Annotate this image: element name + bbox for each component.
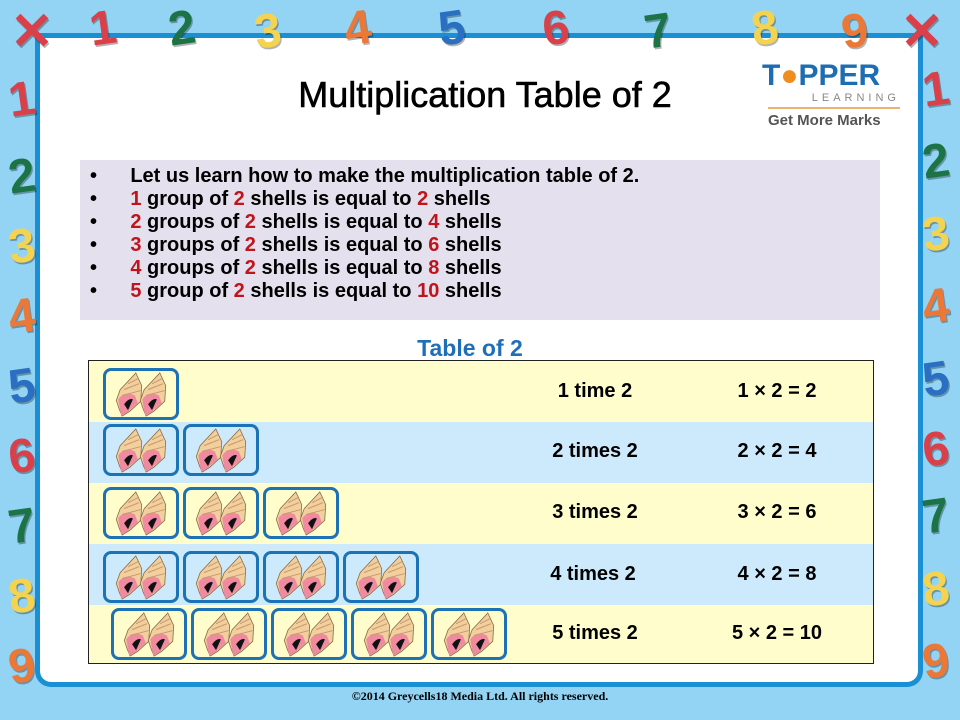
decorative number border: 2 [5, 148, 39, 205]
decorative number border: 1 [5, 71, 39, 128]
decorative number border: 7 [919, 488, 953, 545]
bullet panel [80, 160, 880, 320]
decorative number border: ✕ [10, 3, 54, 61]
row 3 [89, 483, 873, 544]
bullet panel: • 3 groups of 2 shells is equal to 6 shells [90, 234, 502, 256]
row 2: 2 times 2 [552, 440, 638, 462]
decorative number border: 6 [5, 428, 39, 485]
decorative number border: ✕ [900, 3, 944, 61]
decorative number border: 3 [919, 206, 953, 263]
row 4 [89, 544, 873, 605]
table [88, 360, 874, 664]
decorative number border: 5 [919, 351, 953, 408]
bullet panel: • 2 groups of 2 shells is equal to 4 shells [90, 211, 502, 233]
row 5 [89, 605, 873, 664]
table heading: Table of 2 [417, 335, 523, 361]
row 5: 5 times 2 [552, 622, 638, 644]
row 2: 2 × 2 = 4 [738, 440, 816, 462]
bullet panel: • 4 groups of 2 shells is equal to 8 shells [90, 257, 502, 279]
row 1: 1 × 2 = 2 [738, 380, 816, 402]
decorative number border: 8 [748, 0, 782, 57]
decorative number border: 6 [919, 421, 953, 478]
decorative number border: 2 [165, 0, 199, 57]
decorative number border: 7 [641, 3, 675, 60]
decorative number border: 3 [251, 3, 285, 60]
decorative number border: 9 [919, 633, 953, 690]
logo: TopperLearning [762, 59, 900, 129]
decorative number border: 4 [5, 288, 39, 345]
decorative number border: 5 [435, 0, 469, 57]
logo: TopperLearning: Get More Marks [768, 112, 881, 129]
decorative number border: 4 [919, 278, 953, 335]
bullet panel: • 5 group of 2 shells is equal to 10 shells [90, 280, 502, 302]
decorative number border: 1 [919, 61, 953, 118]
copyright footer: ©2014 Greycells18 Media Ltd. All rights reserved. [352, 689, 608, 703]
decorative number border: 1 [86, 0, 120, 57]
decorative number border: 7 [5, 498, 39, 555]
decorative number border: 3 [5, 218, 39, 275]
title: Multiplication Table of 2 [298, 74, 672, 115]
logo: TopperLearning: T●PPER [762, 59, 880, 92]
logo: TopperLearning: LEARNING [812, 92, 900, 104]
decorative number border: 8 [919, 561, 953, 618]
decorative number border: 9 [5, 638, 39, 695]
row 1: 1 time 2 [558, 380, 632, 402]
decorative number border: 4 [341, 0, 375, 57]
bullet panel: • 1 group of 2 shells is equal to 2 shells [90, 188, 490, 210]
decorative number border: 8 [5, 568, 39, 625]
decorative number border: 5 [5, 358, 39, 415]
row 1 [89, 361, 873, 422]
decorative number border: 6 [539, 0, 573, 57]
row 2 [89, 422, 873, 483]
bullet panel: • Let us learn how to make the multiplication table of 2. [90, 165, 639, 187]
row 3: 3 times 2 [552, 501, 638, 523]
decorative number border: 2 [919, 133, 953, 190]
row 4: 4 times 2 [550, 563, 636, 585]
row 5: 5 × 2 = 10 [732, 622, 822, 644]
decorative number border: 9 [838, 3, 872, 60]
row 4: 4 × 2 = 8 [738, 563, 816, 585]
row 3: 3 × 2 = 6 [738, 501, 816, 523]
